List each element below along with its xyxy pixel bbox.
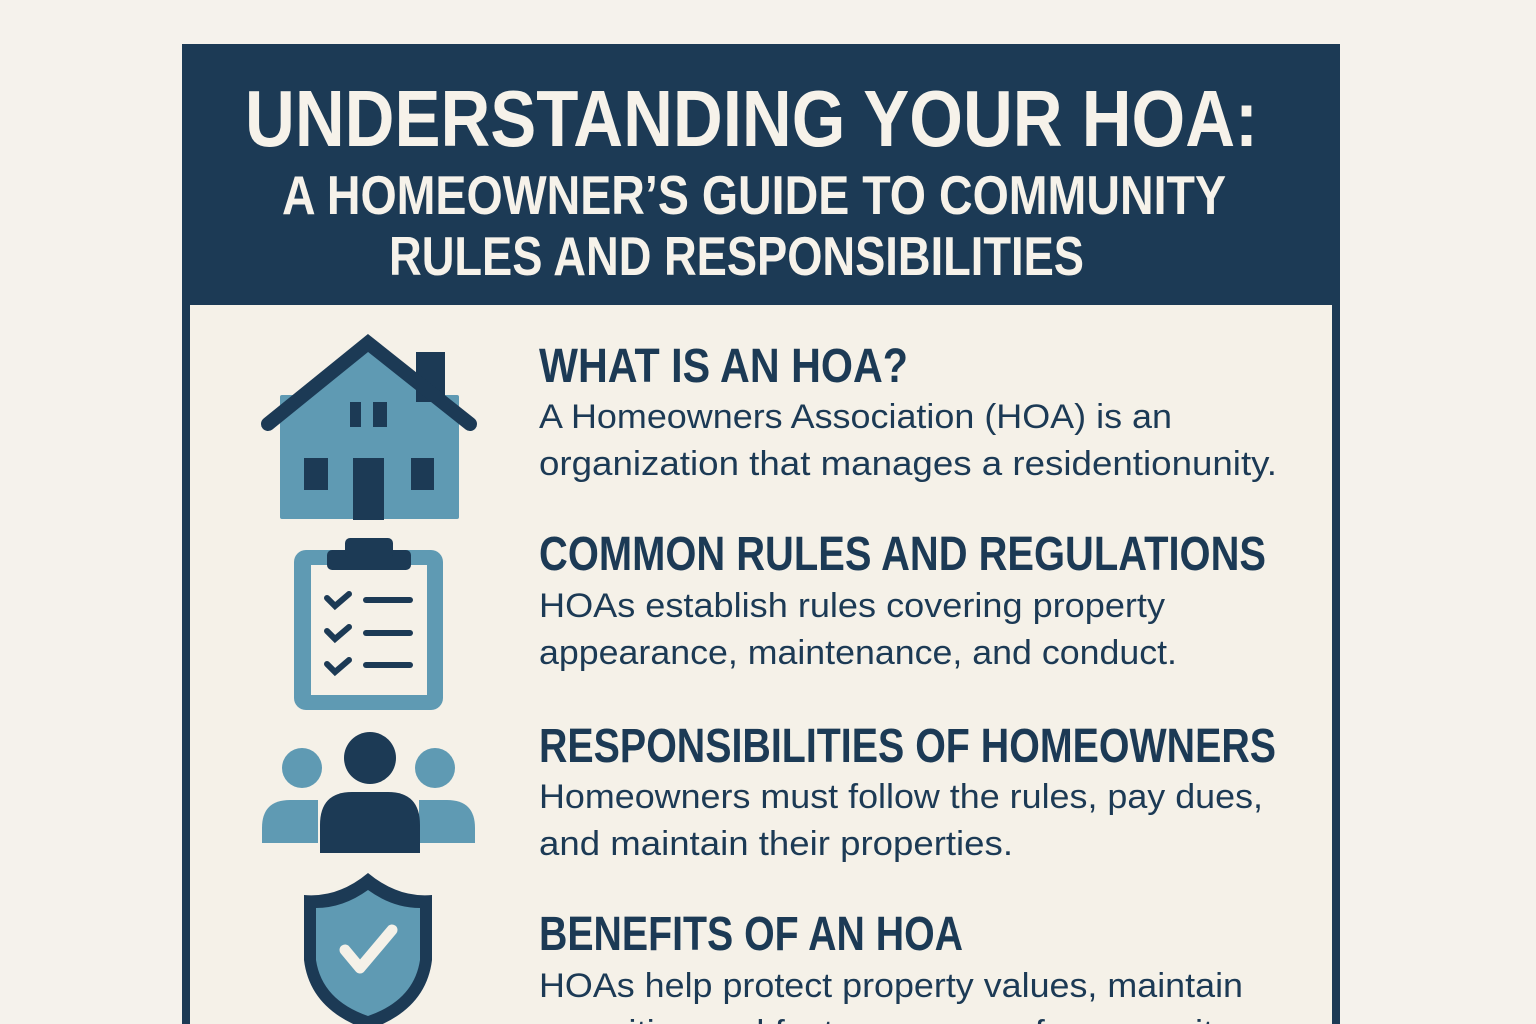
frame (182, 44, 1340, 1024)
title: A HOMEOWNER’S GUIDE TO COMMUNITY (282, 164, 1226, 226)
section: rules: HOAs establish rules covering property (539, 587, 1165, 625)
section: what is an HOA: organization that manages a residentionunity. (539, 445, 1277, 483)
section: responsibilities: Homeowners must follow the rules, pay dues, (539, 778, 1263, 816)
section: what is an HOA: WHAT IS AN HOA? (539, 340, 908, 393)
section: rules: COMMON RULES AND REGULATIONS (539, 528, 1266, 581)
section: benefits: HOAs help protect property values, maintain (539, 967, 1243, 1005)
icon: clipboard (294, 538, 443, 710)
inner panel (190, 305, 1332, 1024)
icon: house (268, 343, 470, 520)
section: what is an HOA (539, 340, 1277, 483)
section: responsibilities: and maintain their properties. (539, 825, 1013, 863)
icon: shield (304, 873, 432, 1024)
section: rules: appearance, maintenance, and conduct. (539, 634, 1177, 672)
section: responsibilities (539, 720, 1276, 863)
icon: people (262, 732, 475, 853)
section: what is an HOA: A Homeowners Association (HOA) is an (539, 398, 1172, 436)
section: benefits: BENEFITS OF AN HOA (539, 908, 963, 961)
section: benefits (539, 908, 1243, 1024)
title: UNDERSTANDING YOUR HOA: (245, 74, 1258, 163)
title: RULES AND RESPONSIBILITIES (389, 225, 1084, 287)
section: responsibilities: RESPONSIBILITIES OF HOMEOWNERS (539, 720, 1276, 773)
title (245, 74, 1258, 287)
section: rules (539, 528, 1266, 672)
